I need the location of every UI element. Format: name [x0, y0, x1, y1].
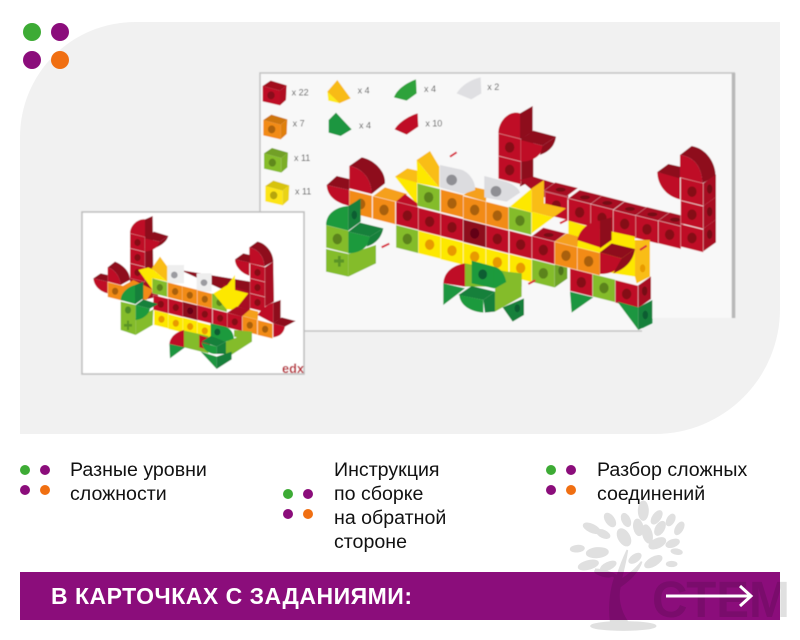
- legend: parts list: x 22: [292, 88, 309, 98]
- text: item 2: Инструкция: [334, 459, 440, 481]
- bar: banner: [20, 572, 780, 620]
- icon: dots, item 1: [20, 465, 50, 495]
- legend: parts list: x 10: [425, 119, 442, 129]
- icon: dots, item 2: [283, 489, 313, 519]
- heading: banner title: В КАРТОЧКАХ С ЗАДАНИЯМИ:: [51, 583, 412, 609]
- text: item 2: по сборке: [334, 483, 423, 505]
- text: item 1: [70, 459, 207, 505]
- legend: parts list: x 11: [294, 153, 310, 163]
- legend: parts list: x 4: [424, 84, 436, 94]
- text: item 1: сложности: [70, 483, 167, 505]
- legend: parts list: x 7: [293, 119, 305, 129]
- icon: dots, item 3: [546, 465, 576, 495]
- illustration: small assembled model: [93, 216, 296, 369]
- text: item 2: на обратной: [334, 507, 446, 529]
- text: item 3: соединений: [597, 483, 705, 505]
- legend: parts list: [263, 77, 499, 205]
- text: item 2: [334, 459, 446, 553]
- logo: tree watermark: [570, 501, 790, 630]
- text: item 3: Разбор сложных: [597, 459, 747, 481]
- legend: parts list: x 4: [359, 120, 371, 130]
- text: item 1: Разные уровни: [70, 459, 207, 481]
- text: item 2: стороне: [334, 531, 407, 553]
- legend: parts list: x 11: [295, 186, 311, 196]
- legend: parts list: x 2: [487, 82, 499, 92]
- text: item 3: [597, 459, 747, 505]
- panel: small finished model card: [82, 212, 305, 376]
- arrow: banner arrow: [666, 586, 751, 606]
- legend: parts list: x 4: [358, 85, 370, 95]
- illustration: large assembled model: [326, 106, 716, 330]
- logo: edx: edx: [282, 361, 305, 376]
- panel: grey background: [20, 22, 780, 434]
- logo: СТЕМ watermark text: СТЕМ: [652, 571, 790, 628]
- icon: top-left dots: [23, 23, 69, 69]
- panel: large instruction card: [260, 73, 735, 331]
